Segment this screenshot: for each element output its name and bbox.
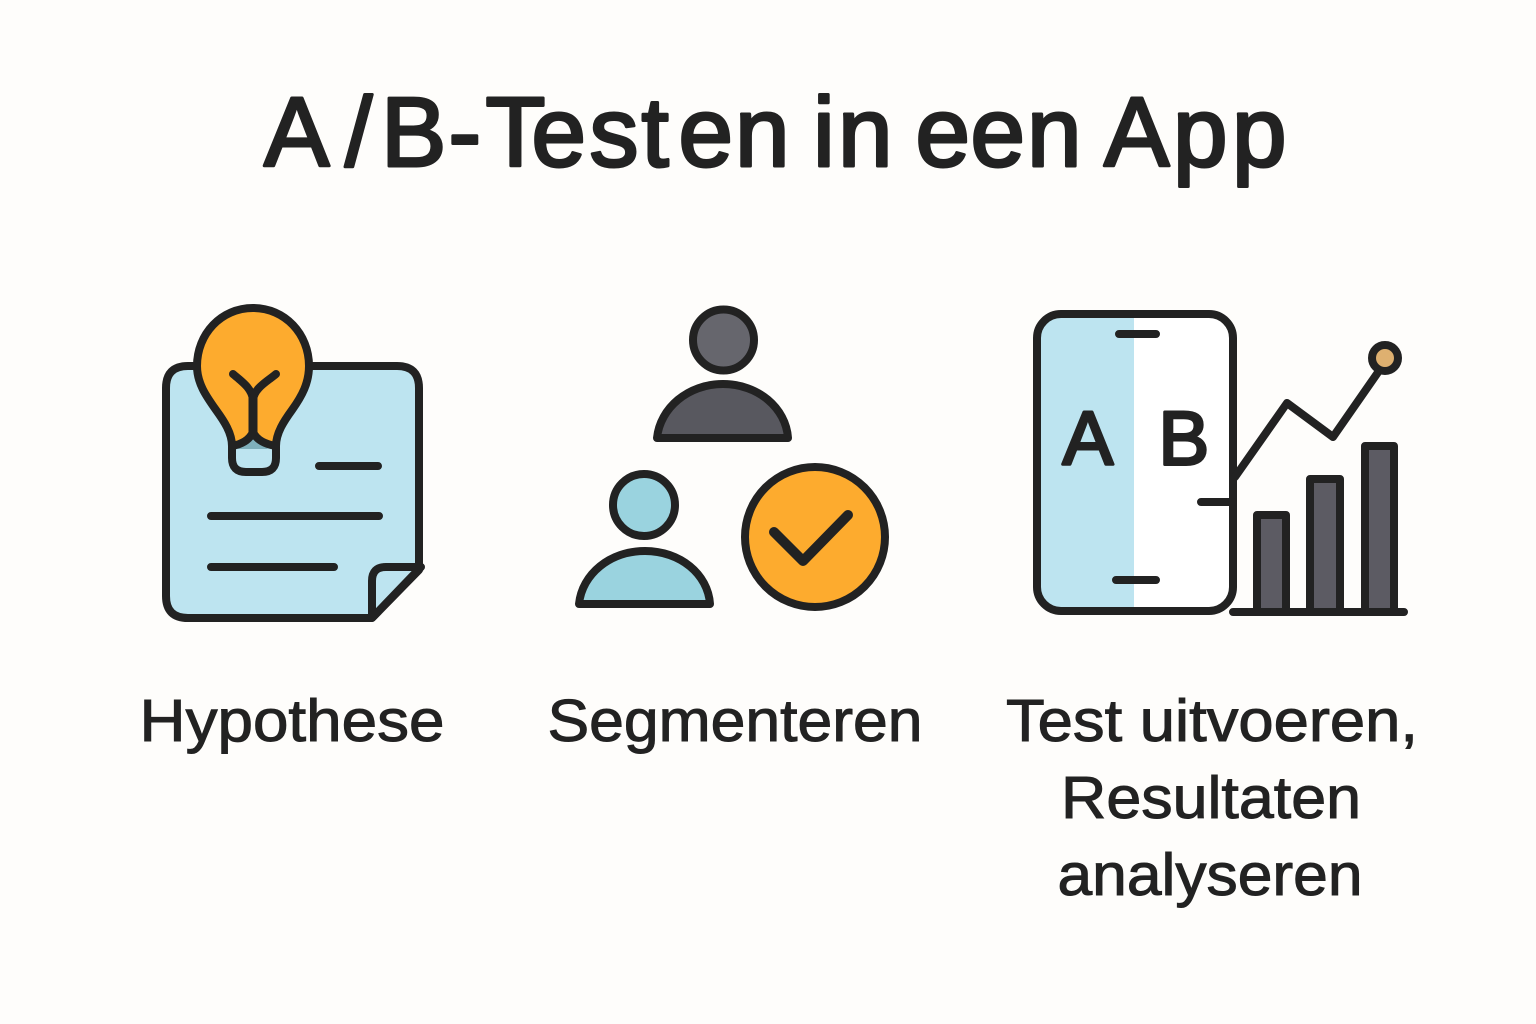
title: A/B-Testen in een App <box>264 77 1287 187</box>
icon: A/B phone with results chart: B <box>1158 396 1209 482</box>
icon: A/B phone with results chart <box>1037 314 1404 612</box>
bulb glass <box>197 308 309 446</box>
phone and chart lines <box>1116 334 1404 612</box>
top person <box>693 310 754 370</box>
chart end dot <box>1372 345 1398 371</box>
label: Test uitvoeren, Resultaten analyseren: Resultaten <box>1061 765 1361 831</box>
label: Test uitvoeren, Resultaten analyseren: Test uitvoeren, <box>1006 688 1418 754</box>
note text lines <box>211 466 379 567</box>
A/B letters: A <box>1062 396 1114 482</box>
note sheet <box>166 366 419 618</box>
phone screen <box>1037 314 1233 611</box>
check badge <box>745 467 885 607</box>
label: Test uitvoeren, Resultaten analyseren <box>1006 688 1418 908</box>
icon: hypothesis note with light bulb <box>166 308 421 618</box>
bulb filament <box>233 374 276 432</box>
label: Hypothese: Hypothese <box>140 688 444 754</box>
bottom person <box>613 474 675 536</box>
label: Segmenteren: Segmenteren <box>548 688 922 754</box>
phone outline <box>1037 314 1233 611</box>
bulb base <box>232 440 276 472</box>
label: Test uitvoeren, Resultaten analyseren: analyseren <box>1058 842 1362 908</box>
folded corner <box>372 567 421 618</box>
bars <box>1257 515 1286 612</box>
icon: user segments with check mark <box>579 310 885 607</box>
